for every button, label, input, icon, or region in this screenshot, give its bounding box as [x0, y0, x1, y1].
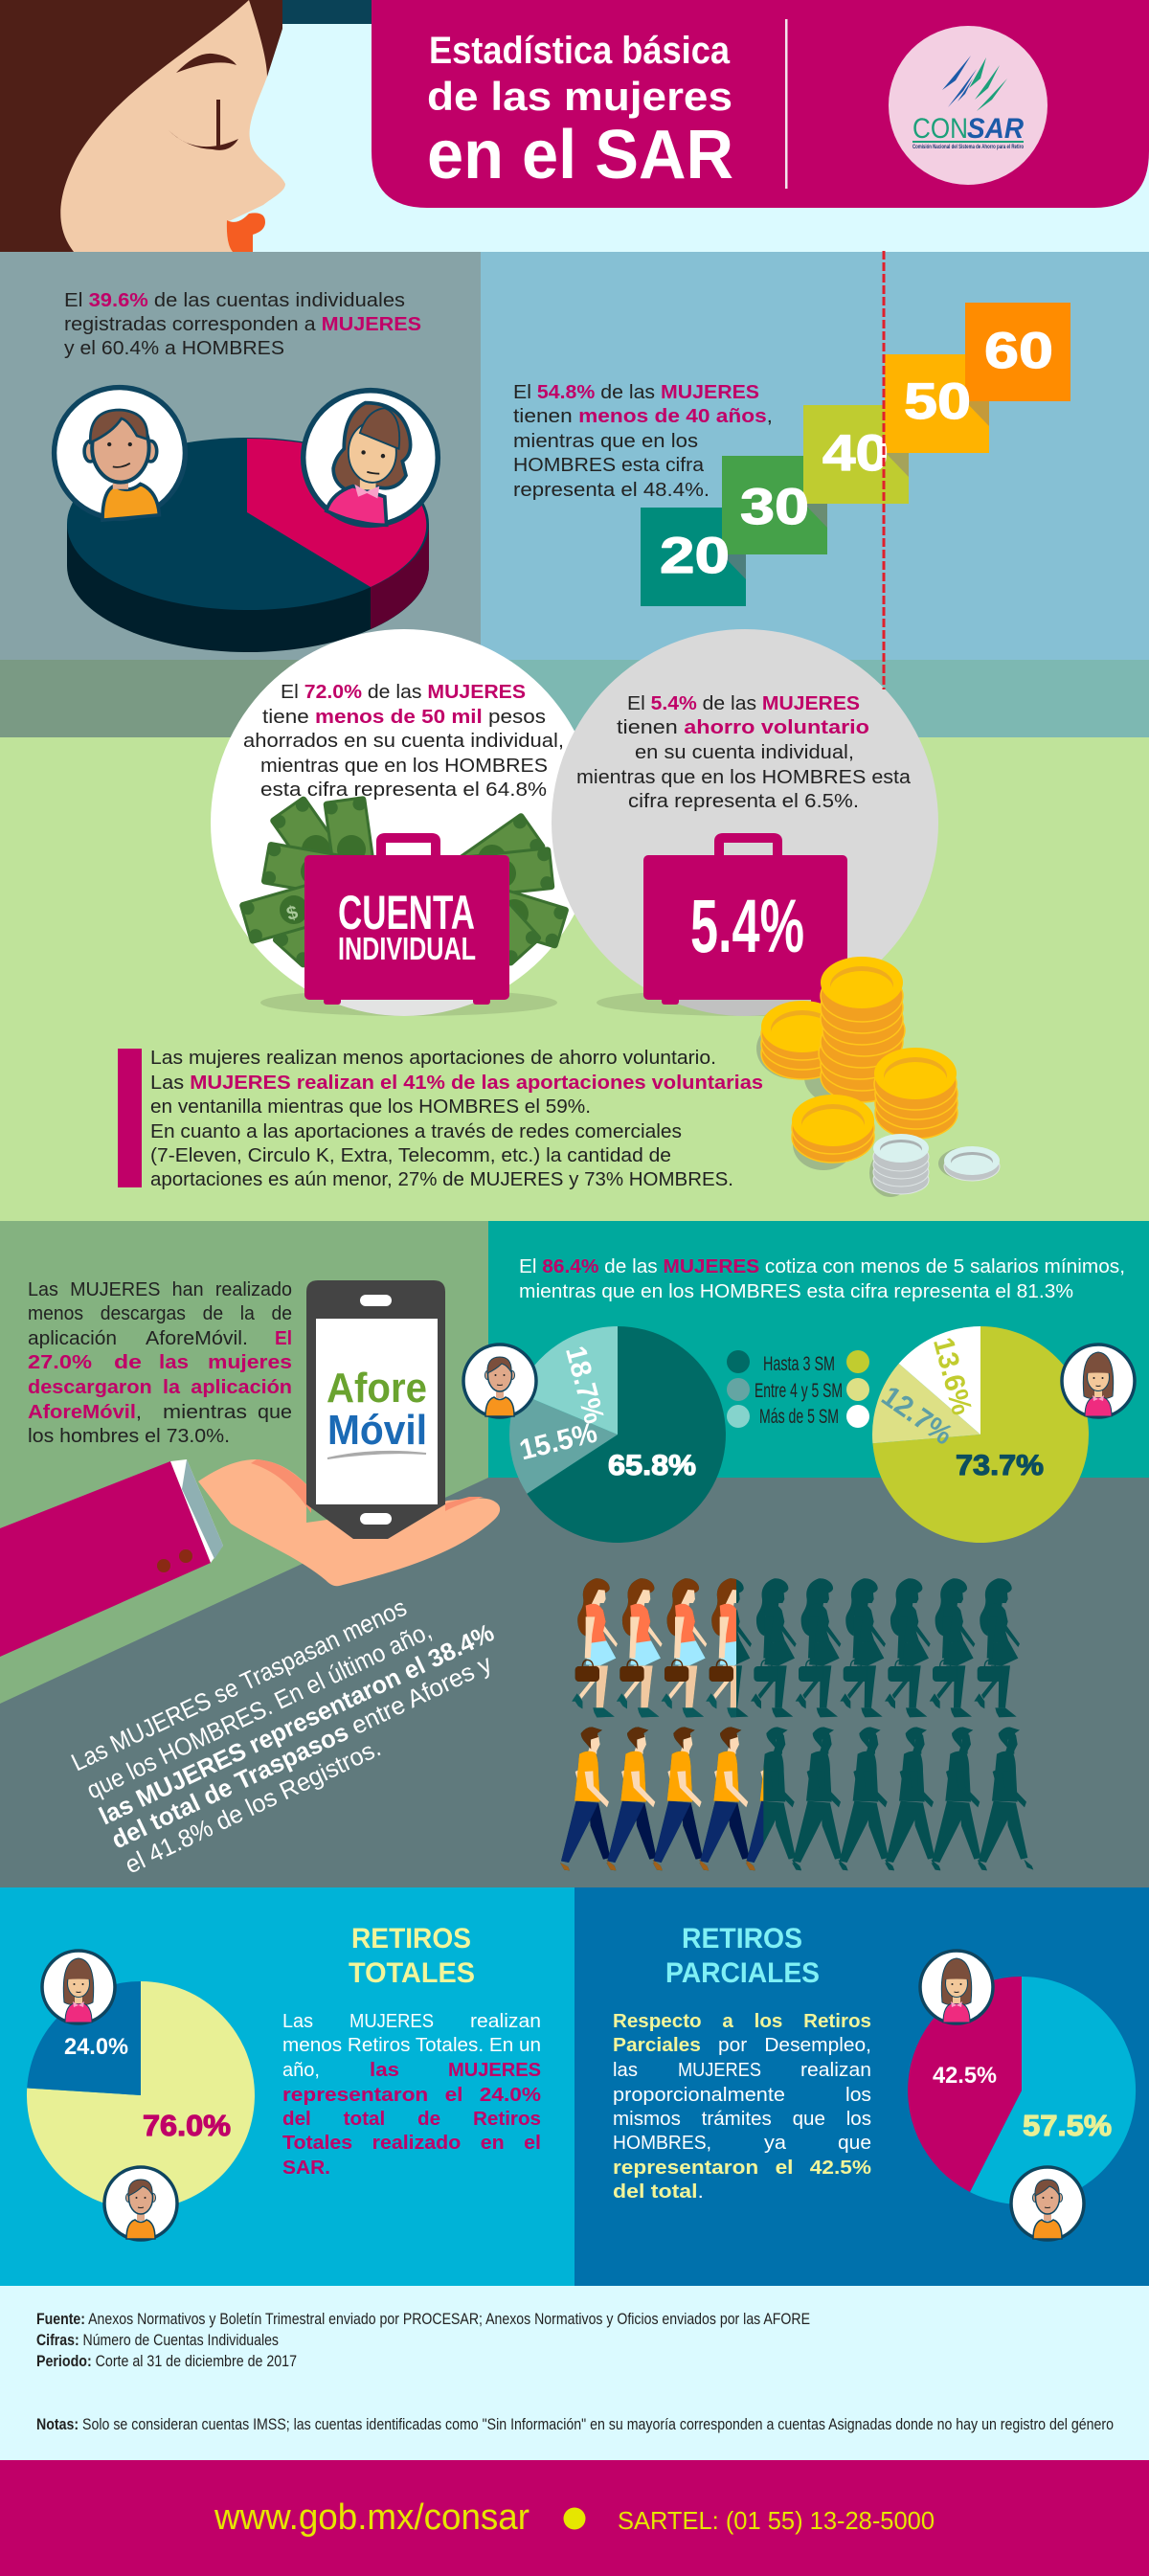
- top accent band: [282, 0, 373, 24]
- legend: Hasta 3 SM: [763, 1353, 835, 1375]
- age steps 20 to 60: 20: [660, 528, 730, 584]
- text: 86.4% salaries: El 86.4% de las MUJERES cotiza con menos de 5 salarios mínimos,: [519, 1255, 1125, 1277]
- legend: Entre 4 y 5 SM: [755, 1380, 843, 1402]
- green panel background: [0, 737, 1149, 1221]
- pie chart: men salaries: [872, 1326, 1089, 1543]
- band behind circles: [0, 660, 481, 737]
- text: AforeMóvil downloads: descargaron la aplicación: [28, 1376, 292, 1398]
- text: AforeMóvil downloads: mujeres: [208, 1351, 292, 1373]
- text: 72.0%: esta cifra representa el 64.8%: [260, 779, 547, 801]
- icon: phone with AforeMóvil logo: Móvil: [327, 1407, 427, 1454]
- text: retiros totales: año,: [282, 2059, 320, 2081]
- heading: retiros parciales: PARCIALES: [665, 1957, 820, 1989]
- icon: banknotes: $: [284, 902, 301, 925]
- pie chart: retiros parciales: 42.5%: [933, 2063, 997, 2089]
- heading: retiros totales: RETIROS: [351, 1923, 471, 1955]
- text: retiros parciales: los: [845, 2084, 871, 2106]
- callout bar: [118, 1049, 142, 1187]
- pie chart: women salaries: 65.8%: [608, 1450, 696, 1481]
- text: retiros totales: SAR.: [282, 2157, 330, 2179]
- avatar: man retiros parciales: [1011, 2167, 1084, 2240]
- text: AforeMóvil downloads: mientras: [163, 1401, 247, 1423]
- pie chart: men salaries: 73.7%: [956, 1450, 1044, 1481]
- circle: under 50 mil: [211, 629, 597, 1016]
- notes background: [0, 2286, 1149, 2460]
- 3D pie chart: accounts by gender: [67, 438, 429, 652]
- panel: retiros totales: [0, 1887, 574, 2286]
- age steps 20 to 60: [641, 303, 1070, 606]
- text: 5.4%: tienen ahorro voluntario: [617, 716, 869, 738]
- panel: traspasos: [0, 1478, 1149, 1887]
- text: AforeMóvil downloads: [28, 1278, 292, 1447]
- red dashed line: [883, 251, 885, 689]
- title: Estadística básica: [429, 30, 731, 72]
- text: sources and notes: [36, 2311, 1114, 2433]
- text: retiros totales: del total de Retiros: [282, 2108, 541, 2130]
- text: voluntary contributions: (7-Eleven, Circulo K, Extra, Telecomm, etc.) la cantidad de: [150, 1144, 671, 1166]
- suitcase: 5.4%: 5.4%: [690, 883, 804, 968]
- panel: salary: [488, 1221, 1149, 1478]
- logo CONSAR: SAR: [967, 113, 1024, 145]
- text: retiros parciales: MUJERES: [678, 2059, 761, 2081]
- pie chart: retiros parciales: 57.5%: [1023, 2109, 1112, 2142]
- avatar: man salary: [463, 1344, 536, 1417]
- illustration: woman's face profile: [0, 0, 285, 252]
- text: 72.0%: tiene menos de 50 mil pesos: [262, 706, 546, 728]
- text: retiros parciales: [613, 2010, 871, 2203]
- text: voluntary contributions: En cuanto a las aportaciones a través de redes comerciales: [150, 1120, 682, 1142]
- age steps 20 to 60: 50: [904, 373, 971, 430]
- text: retiros parciales: del total .: [613, 2181, 704, 2203]
- text: retiros totales: las: [370, 2059, 399, 2081]
- text: retiros totales: realizan: [470, 2010, 541, 2032]
- avatar: man: [55, 388, 185, 520]
- pie chart: men salaries: 13.6%: [927, 1334, 978, 1418]
- text: 5.4%: El 5.4% de las MUJERES: [627, 692, 860, 714]
- text: traspasos rotated: las MUJERES representaron el 38.4%: [95, 1617, 498, 1830]
- avatar: woman retiros totales: [42, 1951, 115, 2023]
- circle: voluntary savings: [552, 629, 938, 1016]
- footer: [0, 2460, 1149, 2576]
- logo CONSAR: CON: [912, 113, 968, 145]
- text: retiros parciales: representaron el 42.5%: [613, 2157, 871, 2179]
- text: retiros totales: menos Retiros Totales. En un: [282, 2034, 541, 2056]
- icon: phone with AforeMóvil logo: Afore: [327, 1365, 427, 1412]
- text: retiros parciales: Parciales por Desempleo,: [613, 2034, 871, 2056]
- text: AforeMóvil downloads: las: [159, 1351, 189, 1373]
- text: retiros totales: representaron el 24.0%: [282, 2084, 541, 2106]
- text: 86.4% salaries: [519, 1255, 1125, 1302]
- avatar: woman salary: [1062, 1344, 1135, 1417]
- text: retiros totales: Las: [282, 2010, 313, 2032]
- pie chart: retiros totales: 24.0%: [64, 2034, 128, 2060]
- pie chart: retiros totales: 76.0%: [143, 2109, 231, 2142]
- icon: coin stacks: [756, 957, 1000, 1197]
- text: AforeMóvil downloads: AforeMóvil ,: [28, 1401, 142, 1423]
- text: 5.4%: en su cuenta individual,: [635, 741, 854, 763]
- suitcase: cuenta individual: CUENTA: [338, 886, 475, 939]
- text: retiros parciales: mismos trámites que los: [613, 2108, 871, 2130]
- title: [427, 30, 733, 193]
- age steps 20 to 60: 40: [822, 425, 889, 482]
- pie chart: women salaries: [509, 1326, 726, 1543]
- logo CONSAR: [889, 26, 1048, 185]
- logo CONSAR: Comisión Nacional del Sistema de Ahorro para el Retiro: [912, 145, 1024, 150]
- text: retiros totales: [282, 2010, 541, 2179]
- panel: AforeMóvil: [0, 1221, 488, 1705]
- text: 5.4%: mientras que en los HOMBRES esta: [576, 766, 912, 788]
- text: AforeMóvil downloads: AforeMóvil.: [146, 1327, 248, 1349]
- text: sources and notes: Fuente: Anexos Normativos y Boletín Trimestral enviado por PROCESAR; Anexos Normativos y Oficios enviados por las AFORE: [36, 2311, 810, 2328]
- text: 54.8% under 40: tienen menos de 40 años ,: [513, 405, 773, 427]
- text: AforeMóvil downloads: de: [114, 1351, 142, 1373]
- pictogram: men: [560, 1727, 1033, 1870]
- pie chart: retiros parciales: [908, 1977, 1136, 2204]
- text: voluntary contributions: aportaciones es aún menor, 27% de MUJERES y 73% HOMBRES.: [150, 1168, 733, 1190]
- suitcase: cuenta individual: [260, 838, 557, 1016]
- text: AforeMóvil downloads: El: [275, 1327, 292, 1349]
- text: 86.4% salaries: mientras que en los HOMBRES esta cifra representa el 81.3%: [519, 1280, 1073, 1302]
- text: traspasos rotated: [67, 1593, 498, 1879]
- text: AforeMóvil downloads: 27.0%: [28, 1351, 92, 1373]
- icon: banknotes: [239, 796, 569, 968]
- text: 5.4%: [576, 692, 912, 812]
- text: 72.0%: [243, 681, 564, 801]
- suitcase: 5.4%: [597, 838, 893, 1016]
- text: 39.6% accounts: El 39.6% de las cuentas individuales: [64, 289, 405, 311]
- title: de las mujeres: [427, 74, 732, 119]
- text: voluntary contributions: en ventanilla mientras que los HOMBRES el 59%.: [150, 1096, 591, 1118]
- header background: [0, 0, 1149, 252]
- panel backgrounds: accounts and age: [0, 252, 481, 661]
- text: retiros parciales: ya: [764, 2132, 787, 2154]
- pie chart: retiros totales: [27, 1981, 255, 2209]
- text: 54.8% under 40: HOMBRES esta cifra: [513, 454, 705, 476]
- text: 39.6% accounts: [64, 289, 421, 359]
- header panel: [372, 0, 1149, 208]
- avatar: woman: [304, 391, 438, 525]
- legend: Más de 5 SM: [759, 1406, 839, 1428]
- pie chart: women salaries: 18.7%: [559, 1343, 610, 1427]
- age steps 20 to 60: 30: [740, 479, 809, 535]
- heading: retiros totales: [349, 1923, 475, 1989]
- pie chart: women salaries: 15.5%: [516, 1417, 600, 1466]
- text: 39.6% accounts: y el 60.4% a HOMBRES: [64, 337, 284, 359]
- text: 72.0%: mientras que en los HOMBRES: [260, 755, 548, 777]
- text: 54.8% under 40: representa el 48.4%.: [513, 479, 710, 501]
- text: retiros parciales: realizan: [800, 2059, 871, 2081]
- text: traspasos rotated: que los HOMBRES. En el último año,: [82, 1616, 436, 1804]
- footer: SARTEL: (01 55) 13-28-5000: [618, 2506, 935, 2535]
- legend: [727, 1350, 869, 1428]
- title: en el SAR: [427, 117, 733, 193]
- illustration: hand and sleeve: [0, 1459, 500, 1657]
- text: 39.6% accounts: registradas corresponden a MUJERES: [64, 313, 421, 335]
- icon: phone with AforeMóvil logo: [306, 1280, 445, 1539]
- text: AforeMóvil downloads: los hombres el 73.0%.: [28, 1425, 230, 1447]
- text: voluntary contributions: Las mujeres realizan menos aportaciones de ahorro voluntario.: [150, 1047, 716, 1069]
- footer: www.gob.mx/consar: [214, 2497, 529, 2538]
- suitcase: cuenta individual: INDIVIDUAL: [338, 931, 476, 966]
- text: AforeMóvil downloads: aplicación: [28, 1327, 117, 1349]
- text: retiros totales: Totales realizado en el: [282, 2132, 541, 2154]
- text: 72.0%: ahorrados en su cuenta individual,: [243, 730, 564, 752]
- text: 54.8% under 40: mientras que en los: [513, 430, 698, 452]
- text: AforeMóvil downloads: menos descargas de la de: [28, 1302, 292, 1324]
- text: 54.8% under 40: El 54.8% de las MUJERES: [513, 381, 759, 403]
- age steps 20 to 60: 60: [984, 323, 1053, 379]
- text: traspasos rotated: del total de Traspasos entre Afores y: [107, 1649, 496, 1854]
- text: 5.4%: cifra representa el 6.5%.: [628, 790, 859, 812]
- heading: retiros parciales: RETIROS: [682, 1923, 802, 1955]
- heading: retiros parciales: [665, 1923, 820, 1989]
- text: retiros parciales: proporcionalmente: [613, 2084, 785, 2106]
- text: AforeMóvil downloads: Las MUJERES han realizado: [28, 1278, 292, 1300]
- text: 72.0%: El 72.0% de las MUJERES: [281, 681, 526, 703]
- text: retiros totales: MUJERES: [349, 2010, 434, 2032]
- text: traspasos rotated: el 41.8% de los Registros.: [121, 1733, 385, 1879]
- text: 54.8% under 40: [513, 381, 773, 501]
- text: retiros parciales: HOMBRES,: [613, 2132, 711, 2154]
- text: sources and notes: Cifras: Número de Cuentas Individuales: [36, 2332, 279, 2349]
- text: voluntary contributions: [150, 1047, 763, 1190]
- text: retiros parciales: las: [613, 2059, 638, 2081]
- text: traspasos rotated: Las MUJERES se Traspasan menos: [67, 1593, 411, 1776]
- panel: retiros parciales: [574, 1887, 1149, 2286]
- text: retiros parciales: Respecto a los Retiros: [613, 2010, 871, 2032]
- text: retiros totales: MUJERES: [448, 2059, 541, 2081]
- pie chart: men salaries: 12.7%: [876, 1380, 958, 1451]
- pictogram: women: [572, 1578, 1020, 1717]
- text: retiros parciales: que: [838, 2132, 871, 2154]
- text: AforeMóvil downloads: que: [258, 1401, 292, 1423]
- text: voluntary contributions: Las MUJERES realizan el 41% de las aportaciones voluntarias: [150, 1072, 763, 1094]
- heading: retiros totales: TOTALES: [349, 1957, 475, 1989]
- avatar: woman retiros parciales: [920, 1951, 993, 2023]
- avatar: man retiros totales: [104, 2167, 177, 2240]
- text: sources and notes: Periodo: Corte al 31 de diciembre de 2017: [36, 2353, 297, 2370]
